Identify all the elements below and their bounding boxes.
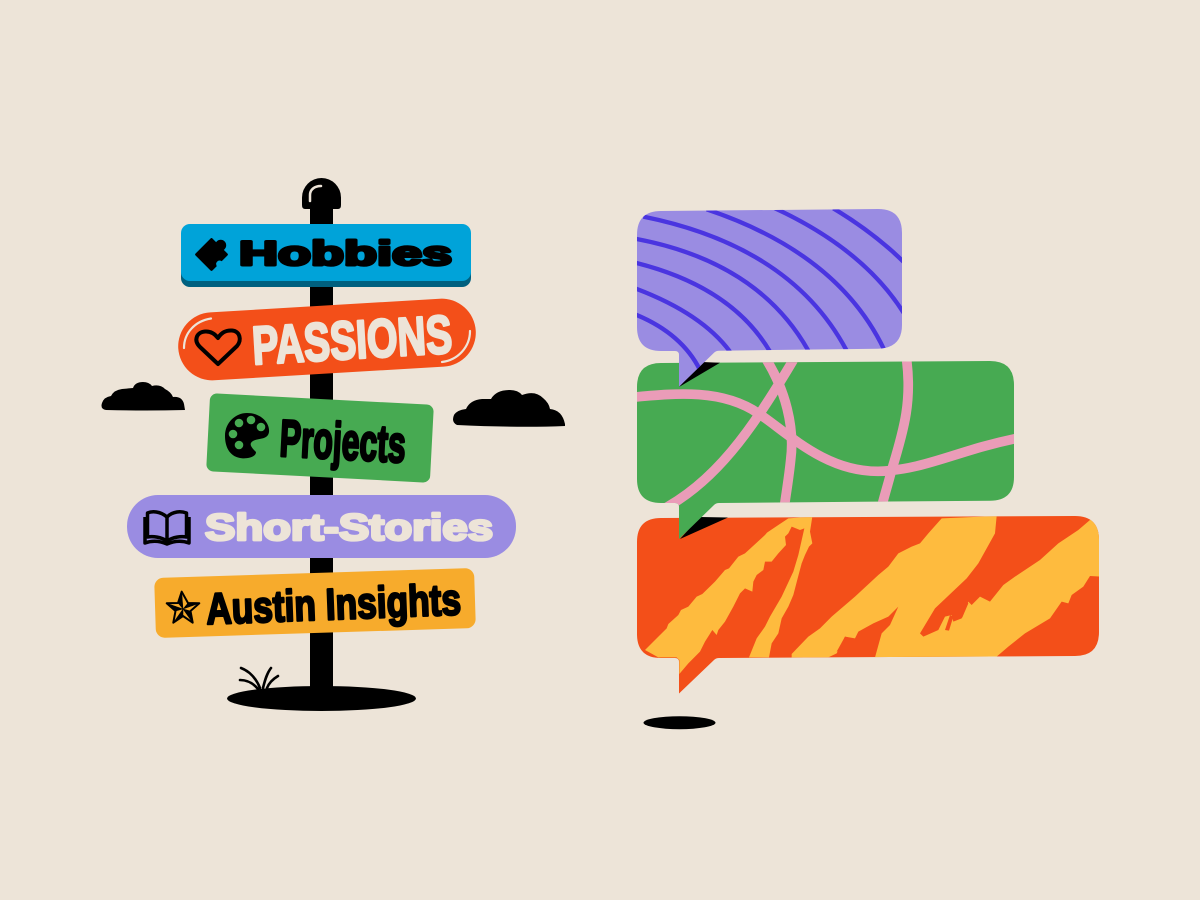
floating shadow (644, 716, 716, 729)
sign: Passions (176, 297, 478, 382)
sign: Austin Insights (154, 568, 476, 638)
post cap (302, 178, 341, 209)
label: Hobbies: Hobbies (239, 235, 452, 273)
yellow torn stripes (645, 516, 1102, 674)
label: Passions: PASSIONS (251, 305, 454, 376)
speech bubbles (630, 205, 1110, 729)
cloud left (102, 382, 185, 410)
sign: Hobbies (181, 224, 471, 287)
icon: book (145, 512, 189, 544)
bubble: green with pink roads (630, 355, 1020, 545)
label: Austin Insights: Austin Insights (205, 575, 462, 634)
ground shadow (227, 686, 416, 711)
cloud right (453, 390, 565, 427)
bubble: orange tiger stripes (637, 516, 1099, 694)
icon: heart (196, 330, 240, 364)
signpost (102, 178, 565, 711)
icon: grass (240, 668, 278, 689)
shadow under green tail (680, 517, 728, 539)
orange flecks (837, 602, 968, 652)
post (310, 205, 333, 690)
icon: puzzle piece (195, 233, 236, 274)
bubble: purple with curved stripes (630, 205, 910, 390)
icon: star (167, 592, 199, 623)
blue curved lines (635, 208, 905, 370)
sign: Projects (206, 393, 434, 483)
label: Projects: Projects (278, 410, 407, 474)
shadow under purple tail (679, 362, 720, 387)
label: Short-Stories: Short-Stories (205, 507, 493, 548)
highlight arcs (184, 318, 470, 362)
icon: palette (225, 413, 269, 458)
illustration: signpost and speech bubbles (102, 178, 1099, 730)
pink roads (632, 360, 1018, 512)
sign: Short-Stories (127, 495, 516, 558)
